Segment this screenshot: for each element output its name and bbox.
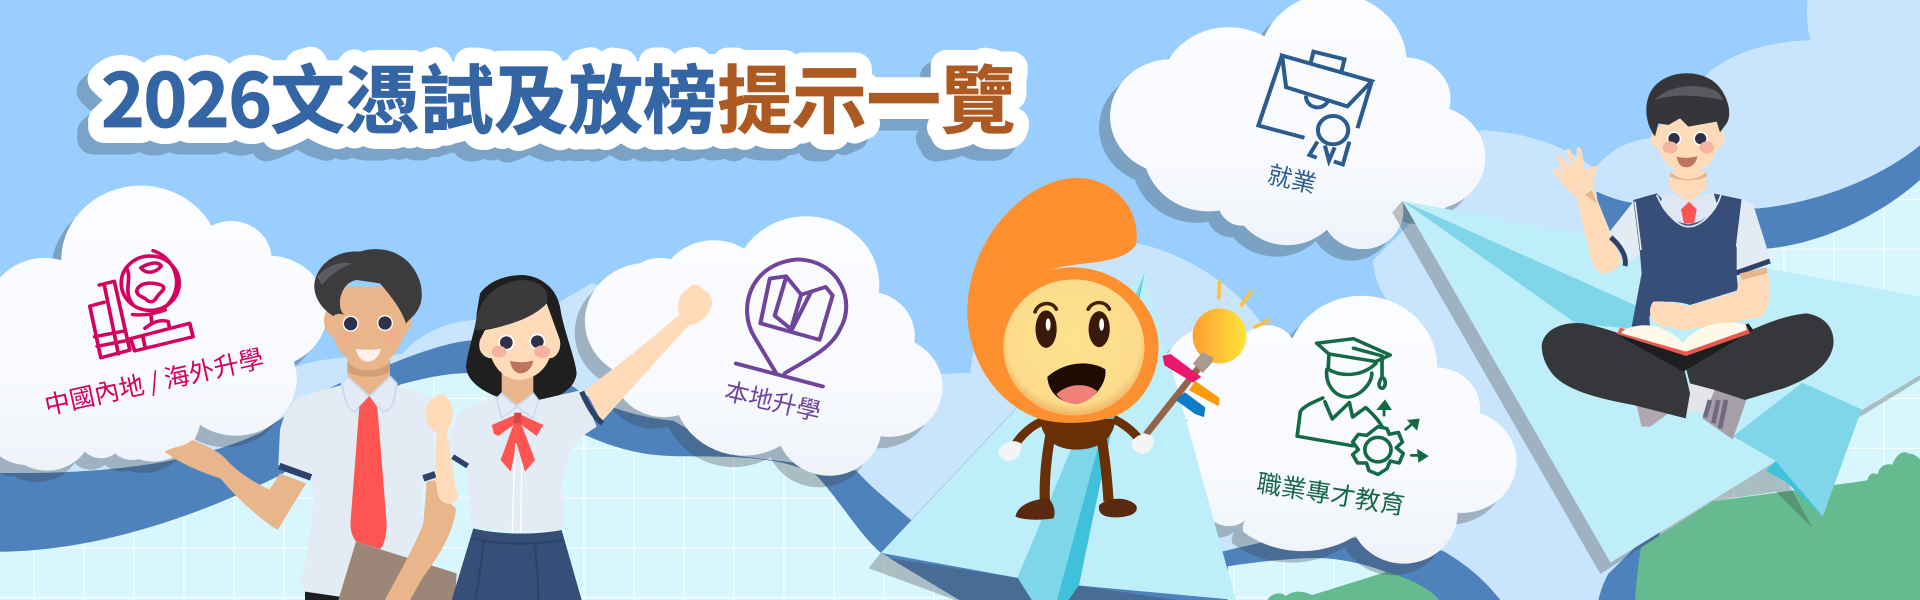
boy lower arm <box>385 480 456 600</box>
icon: graduate with gear <box>1297 339 1403 474</box>
boy collar <box>342 377 397 412</box>
seated boy tie <box>1681 202 1697 223</box>
label: local study: 本地升學 <box>721 372 825 429</box>
seated boy legs <box>1542 323 1690 418</box>
seated boy eyes <box>1667 131 1708 146</box>
character: girl cheering <box>425 275 712 600</box>
plane shadow <box>1392 201 1813 574</box>
mascot body <box>1040 419 1116 450</box>
background: sky <box>0 0 1811 383</box>
girl placket <box>512 443 522 533</box>
boy folder <box>338 542 457 600</box>
mascot: orange number six <box>967 178 1269 520</box>
girl fist and arm <box>425 394 458 504</box>
seated boy sleeves <box>1608 202 1640 265</box>
girl neck <box>502 373 533 405</box>
plane shadow <box>869 553 1032 600</box>
girl skirt <box>452 528 582 600</box>
icon: gear arrows <box>1379 402 1426 460</box>
plane body and wing <box>1402 201 1920 562</box>
character: boy presenting <box>164 249 457 600</box>
label: vocational education: 職業專才教育 <box>1254 463 1407 522</box>
grass: right hill <box>1635 452 1920 600</box>
boy cheeks <box>337 330 400 346</box>
girl fringe <box>475 280 547 330</box>
label: employment: 就業 <box>1264 156 1320 201</box>
lightbulb <box>1193 308 1247 364</box>
cloud: employment <box>1099 0 1485 261</box>
plane right wing <box>1079 272 1236 600</box>
cloud: local study <box>575 216 943 487</box>
mascot mouth <box>1047 363 1106 404</box>
title: 2026文憑試及放榜提示一覽 <box>101 42 1015 149</box>
boy hair <box>314 249 422 323</box>
seated boy neck <box>1670 172 1707 203</box>
plane lower fold <box>1733 383 1862 517</box>
seated boy hair <box>1646 73 1729 137</box>
boy eyes <box>343 315 393 332</box>
mascot tongue <box>1056 385 1097 404</box>
boy trousers <box>305 592 340 600</box>
bulb rays <box>1219 282 1269 327</box>
mascot arms <box>1013 419 1140 448</box>
open book cover <box>1617 326 1750 356</box>
boy mouth <box>356 349 381 362</box>
girl raised arm <box>585 285 712 422</box>
icon: book in location pin <box>736 259 846 386</box>
seated boy left foot <box>1636 403 1673 427</box>
mascot shoes <box>1016 498 1137 520</box>
girl hair back <box>466 275 577 400</box>
icon: globe and books <box>90 251 193 358</box>
mascot eyes <box>1036 310 1110 348</box>
girl bow <box>492 415 543 472</box>
plane upper fold <box>1402 201 1637 329</box>
title: white outline layer: 2026文憑試及放榜提示一覽 <box>101 42 1015 149</box>
character: boy sitting on plane <box>1542 73 1834 439</box>
mascot eyebrows <box>1035 303 1109 312</box>
panel: paper plane, right <box>1392 201 1920 574</box>
boy neck <box>347 360 390 397</box>
girl mouth <box>510 361 533 373</box>
icon: briefcase and rosette <box>1258 52 1372 165</box>
plane centre fold <box>1018 272 1145 600</box>
plane dark fold <box>1766 461 1823 517</box>
label: mainland and overseas: 中國內地 / 海外升學 <box>41 339 267 423</box>
seated boy forearm <box>1650 268 1770 330</box>
plane dark fold <box>1057 272 1145 600</box>
wand <box>1146 367 1199 434</box>
seated boy cheeks <box>1663 141 1714 153</box>
seated boy waving arm <box>1553 147 1622 273</box>
mascot legs <box>1045 436 1109 501</box>
panel: paper plane under mascot <box>869 272 1236 600</box>
plane left wing <box>881 272 1145 578</box>
girl blouse <box>448 390 597 532</box>
cloud: vocational education <box>1135 296 1517 575</box>
girl collar <box>497 393 538 418</box>
seated boy sleeve trim <box>1611 237 1770 273</box>
mascot gloves <box>999 434 1154 461</box>
signs <box>1162 354 1201 383</box>
boy shirt <box>278 385 435 600</box>
grass: left mound <box>1267 572 1439 600</box>
boy sleeve trim <box>279 466 435 478</box>
boy head <box>324 287 411 369</box>
boy outstretched arm <box>164 440 306 530</box>
cloud: mainland and overseas study <box>0 186 327 482</box>
seated boy mouth <box>1677 156 1697 167</box>
seated boy collar <box>1660 192 1717 224</box>
seated boy head <box>1651 117 1725 174</box>
girl face <box>479 303 560 380</box>
mascot face <box>1003 279 1144 416</box>
girl sleeve trim <box>453 392 603 466</box>
girl cheeks <box>492 345 550 358</box>
seated boy vest trim <box>1635 195 1742 250</box>
seated boy sock <box>1687 383 1715 413</box>
seated boy lap shadow <box>1617 323 1753 372</box>
girl eyes <box>498 334 545 351</box>
seated boy right shoe <box>1702 389 1747 439</box>
mascot head <box>967 178 1159 423</box>
open book pages <box>1622 322 1747 352</box>
boy tie <box>351 396 387 549</box>
title: shadow layer: 2026文憑試及放榜提示一覽 <box>90 54 1004 160</box>
seated boy vest <box>1632 193 1742 327</box>
